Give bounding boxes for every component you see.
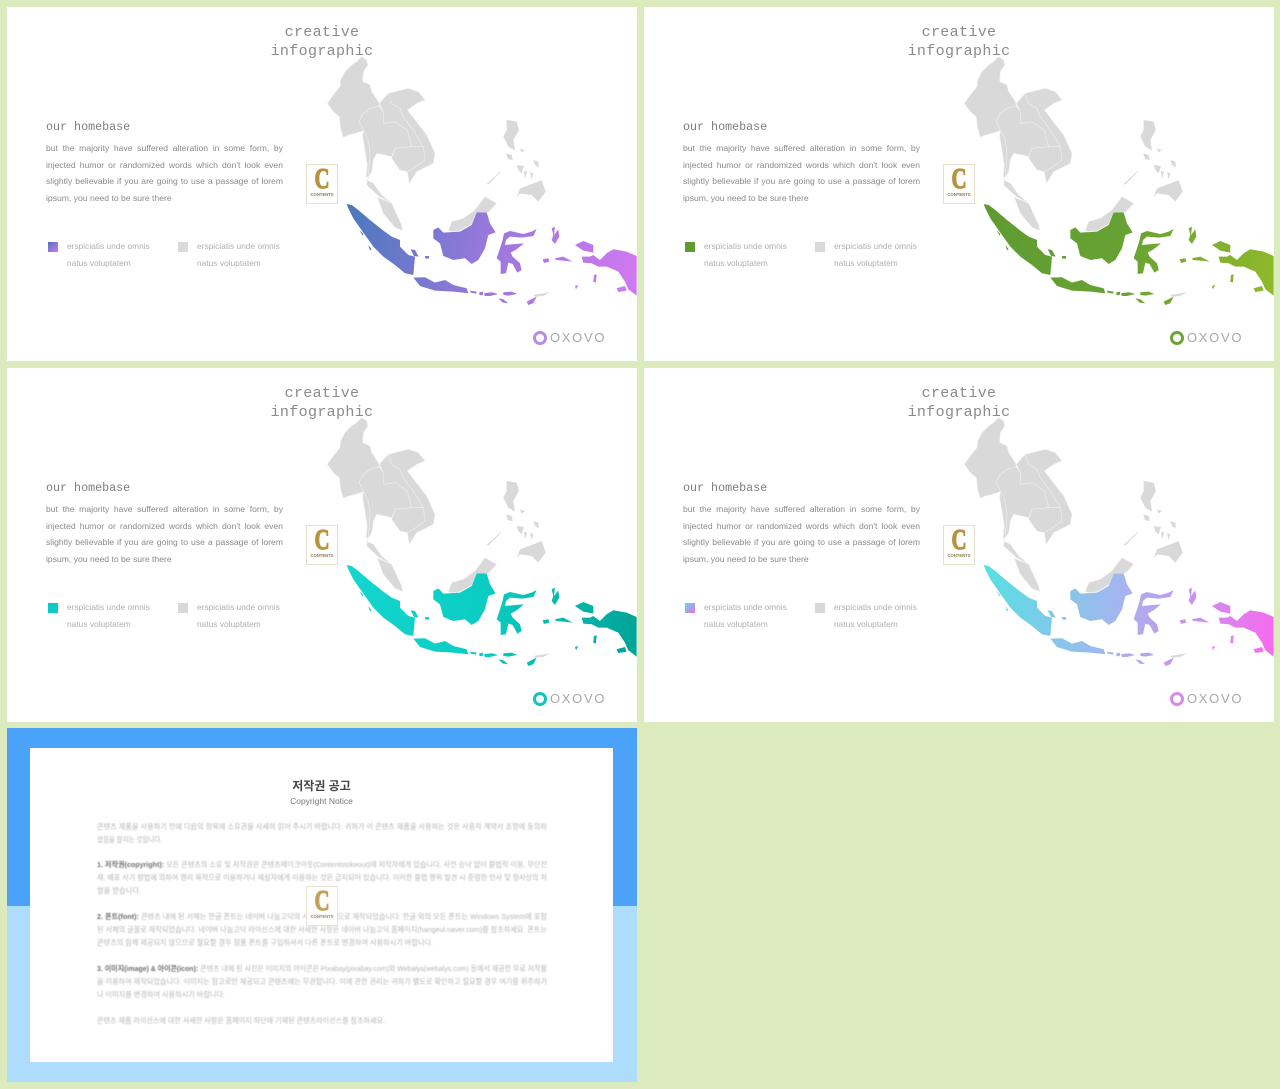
text block: ipsum, you need to be sure there <box>683 192 809 202</box>
copyright body text: 을 이용하여 제작되었습니다. 이미지는 참고로만 제공되고 콘텐츠에는 무관합니다. 이에 관한 권리는 귀하가 별도로 확인하고 필요할 경우 여기를 위주하거 <box>97 977 547 986</box>
title <box>908 24 1010 60</box>
legend swatch: gray <box>178 242 188 252</box>
legend label: highlighted <box>704 241 787 268</box>
legend label: gray <box>834 602 917 629</box>
legend swatch: gray <box>815 242 825 252</box>
text block: but the majority have suffered alteration in some form, by <box>683 504 920 514</box>
watermark logo: CONTENTS <box>310 914 334 919</box>
text block: but the majority have suffered alteration in some form, by <box>46 504 283 514</box>
panel: teal map slide <box>7 368 637 722</box>
legend label: gray: natus voluptatem <box>197 258 261 268</box>
legend label: gray: erspiciatis unde omnis <box>197 602 280 612</box>
copyright subheading: Copyright Notice <box>290 796 353 806</box>
text block: injected humor or randomized words which don't look even <box>46 160 283 170</box>
copyright body text: 된 서체의 글꼴로 제작되었습니다. 네이버 나눔고딕 라이선스에 대한 사세한 사항은 네이버 나눔고딕 홈페이지(hangeul.naver.com)를 참조하세요. 폰트는 <box>97 925 547 934</box>
text block <box>46 504 283 564</box>
watermark logo <box>943 525 975 565</box>
title: infographic <box>271 404 373 421</box>
panel: green map slide <box>644 7 1274 361</box>
legend label: gray: natus voluptatem <box>197 619 261 629</box>
heading: our homebase <box>683 120 767 134</box>
text block: slightly believable if you are going to use a passage of lorem <box>46 537 283 547</box>
brand logo: OXOVO <box>1187 330 1243 345</box>
legend label: gray: erspiciatis unde omnis <box>197 241 280 251</box>
watermark logo <box>306 886 338 926</box>
text block: slightly believable if you are going to use a passage of lorem <box>46 176 283 186</box>
copyright body text: 나 이미지를 변경하여 사용하시기 바랍니다. <box>97 990 225 999</box>
legend swatch: highlighted <box>685 603 695 613</box>
title: creative <box>922 24 996 41</box>
map: Southeast Asia with Indonesia highlighted teal <box>327 418 637 666</box>
copyright body text: 2. 폰트(font): 콘텐츠 내에 된 서체는 한글 폰트는 네이버 나눔고딕의 서체를 기반으로 제작되었습니다. 한글 외의 모든 폰트는 Windows System에 포함 <box>97 912 547 921</box>
panel: pastel map slide <box>644 368 1274 722</box>
watermark logo: CONTENTS <box>310 553 334 558</box>
copyright body text: 콘텐츠 제품을 사용하기 전에 다음의 항목에 소유권을 사세히 읽어 주시기 바랍니다. 귀하가 이 콘텐츠 제품을 사용하는 것은 사용자 계약서 조항에 동의하 <box>97 822 547 831</box>
title: creative <box>285 385 359 402</box>
title: infographic <box>908 43 1010 60</box>
text block: ipsum, you need to be sure there <box>46 554 172 564</box>
legend label: highlighted <box>704 602 787 629</box>
legend label: gray <box>197 241 280 268</box>
legend label: gray: natus voluptatem <box>834 619 898 629</box>
text block: but the majority have suffered alteration in some form, by <box>683 143 920 153</box>
legend swatch: gray <box>178 603 188 613</box>
legend label: highlighted: erspiciatis unde omnis <box>67 241 150 251</box>
heading: our homebase <box>46 481 130 495</box>
copyright heading: 저작권 공고 <box>292 779 351 793</box>
map: Southeast Asia with Indonesia highlighted green <box>964 56 1274 305</box>
text block: slightly believable if you are going to use a passage of lorem <box>683 176 920 186</box>
legend label: gray <box>197 602 280 629</box>
legend label: highlighted: natus voluptatem <box>704 619 768 629</box>
brand logo: OXOVO <box>550 330 606 345</box>
copyright body text <box>96 822 547 1025</box>
legend label: gray: erspiciatis unde omnis <box>834 602 917 612</box>
copyright body text: 벌을 받습니다. <box>97 886 141 895</box>
legend label: highlighted: natus voluptatem <box>704 258 768 268</box>
brand logo: OXOVO <box>550 691 606 706</box>
text block: slightly believable if you are going to use a passage of lorem <box>683 537 920 547</box>
legend swatch: gray <box>815 603 825 613</box>
legend swatch: highlighted <box>48 242 58 252</box>
text block <box>683 143 920 202</box>
heading: our homebase <box>46 120 130 134</box>
legend label: highlighted <box>67 241 150 268</box>
legend label: highlighted: natus voluptatem <box>67 619 131 629</box>
legend swatch: highlighted <box>48 603 58 613</box>
text block <box>46 143 283 202</box>
text block: injected humor or randomized words which don't look even <box>683 160 920 170</box>
watermark logo <box>306 525 338 565</box>
text block: injected humor or randomized words which don't look even <box>46 520 283 530</box>
copyright body text: 콘텐츠의 함께 제공되지 않으므로 필요할 경우 정품 폰트를 구입하셔서 다른 폰트로 변경하여 사용하시기 바랍니다. <box>97 938 433 947</box>
legend label: highlighted: erspiciatis unde omnis <box>704 602 787 612</box>
legend label: gray <box>834 241 917 268</box>
title: infographic <box>271 43 373 60</box>
watermark logo: CONTENTS <box>947 553 971 558</box>
watermark logo <box>306 164 338 204</box>
copyright body text: 재, 배포 사기 방법에 의하여 영리 목적으로 이용하거나 제삼자에게 이용하는 것은 금지되어 있습니다. 이러한 불법 행위 발견 시 준엄한 민사 및 형사상의 처 <box>97 873 547 882</box>
watermark logo: CONTENTS <box>310 192 334 197</box>
panel: copyright notice <box>7 728 637 1082</box>
text block <box>683 504 920 564</box>
panel: purple map slide <box>7 7 637 361</box>
legend label: highlighted: natus voluptatem <box>67 258 131 268</box>
legend label: highlighted: erspiciatis unde omnis <box>67 602 150 612</box>
map: Southeast Asia with Indonesia highlighted purple <box>327 56 637 305</box>
title <box>271 385 373 421</box>
text block: ipsum, you need to be sure there <box>683 554 809 564</box>
title: creative <box>922 385 996 402</box>
legend label: highlighted <box>67 602 150 629</box>
legend label: gray: erspiciatis unde omnis <box>834 241 917 251</box>
map: Southeast Asia with Indonesia highlighted pastel gradient <box>964 418 1274 666</box>
legend swatch: highlighted <box>685 242 695 252</box>
legend label: highlighted: erspiciatis unde omnis <box>704 241 787 251</box>
text block: injected humor or randomized words which don't look even <box>683 520 920 530</box>
text block: but the majority have suffered alteration in some form, by <box>46 143 283 153</box>
text block: ipsum, you need to be sure there <box>46 192 172 202</box>
title: infographic <box>908 404 1010 421</box>
copyright body text: 1. 저작권(copyright): 모든 콘텐츠의 소유 및 저작권은 콘텐츠메이크아웃(Contentstokeout)에 저작자에게 있습니다. 사전 승낙 없이 불법적 이용, 무단전 <box>97 860 547 869</box>
title <box>271 24 373 60</box>
title <box>908 385 1010 421</box>
brand logo: OXOVO <box>1187 691 1243 706</box>
watermark logo: CONTENTS <box>947 192 971 197</box>
copyright body text: 셨음을 알리는 것입니다. <box>97 835 162 844</box>
watermark logo <box>943 164 975 204</box>
copyright body text: 콘텐츠 제품 라이선스에 대한 사세한 사항은 홈페이지 하단에 기재된 콘텐츠라이선스를 참조하세요. <box>97 1016 385 1025</box>
legend label: gray: natus voluptatem <box>834 258 898 268</box>
copyright body text: 3. 이미지(image) & 아이콘(icon): 콘텐츠 내에 된 사진은 이미지의 아이콘은 Pixabay(pixabay.com)와 Webalys(webalys.com) 등에서 제공한 무료 저작물 <box>97 964 547 973</box>
title: creative <box>285 24 359 41</box>
heading: our homebase <box>683 481 767 495</box>
